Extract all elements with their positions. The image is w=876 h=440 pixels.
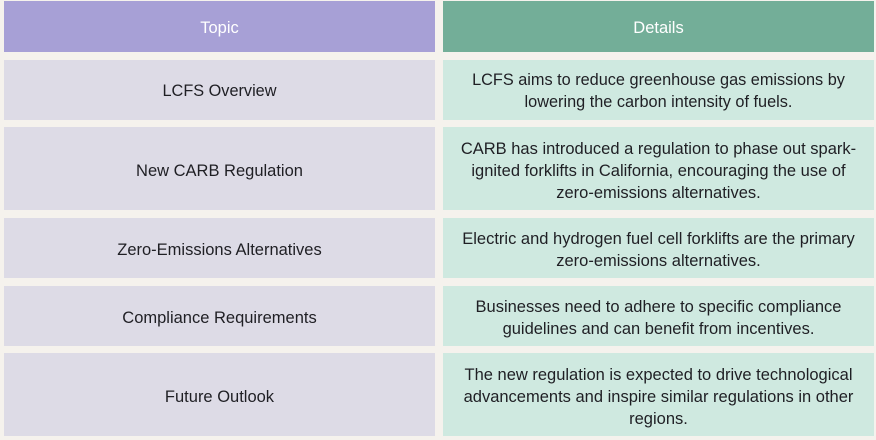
details: Future Outlook: regions. <box>629 410 688 428</box>
header: Topic: Topic <box>200 18 239 36</box>
topic: Future Outlook: Future Outlook <box>165 388 274 406</box>
topic: LCFS Overview: LCFS Overview <box>162 82 276 100</box>
details: Zero-Emissions Alternatives: zero-emissions alternatives. <box>556 252 761 270</box>
topic: Compliance Requirements: Compliance Requirements <box>122 309 317 327</box>
header: Details: Details <box>633 18 684 36</box>
details: LCFS Overview: LCFS aims to reduce greenhouse gas emissions by <box>472 71 845 89</box>
details: LCFS Overview: lowering the carbon intensity of fuels. <box>525 93 792 111</box>
details: New CARB Regulation: ignited forklifts in California, encouraging the use of <box>471 162 846 180</box>
header: Topic <box>4 1 435 52</box>
topic: Zero-Emissions Alternatives: Zero-Emissions Alternatives <box>117 241 322 259</box>
topic: Future Outlook <box>4 353 435 436</box>
details: New CARB Regulation <box>443 127 874 210</box>
topic: New CARB Regulation <box>4 127 435 210</box>
details: New CARB Regulation: zero-emissions alternatives. <box>556 184 761 202</box>
details: Compliance Requirements <box>443 286 874 346</box>
details: Zero-Emissions Alternatives: Electric and hydrogen fuel cell forklifts are the primary <box>462 230 855 248</box>
details: Compliance Requirements: guidelines and can benefit from incentives. <box>503 320 814 338</box>
topic: Compliance Requirements <box>4 286 435 346</box>
topic: Zero-Emissions Alternatives <box>4 218 435 278</box>
details: Future Outlook <box>443 353 874 436</box>
topic: New CARB Regulation: New CARB Regulation <box>136 162 303 180</box>
details: LCFS Overview <box>443 60 874 120</box>
header: Details <box>443 1 874 52</box>
details: Future Outlook: advancements and inspire similar regulations in other <box>464 388 853 406</box>
details: New CARB Regulation: CARB has introduced a regulation to phase out spark- <box>461 140 856 158</box>
details: Compliance Requirements: Businesses need to adhere to specific compliance <box>476 298 841 316</box>
details: Future Outlook: The new regulation is expected to drive technological <box>464 366 852 384</box>
details: Zero-Emissions Alternatives <box>443 218 874 278</box>
topic: LCFS Overview <box>4 60 435 120</box>
